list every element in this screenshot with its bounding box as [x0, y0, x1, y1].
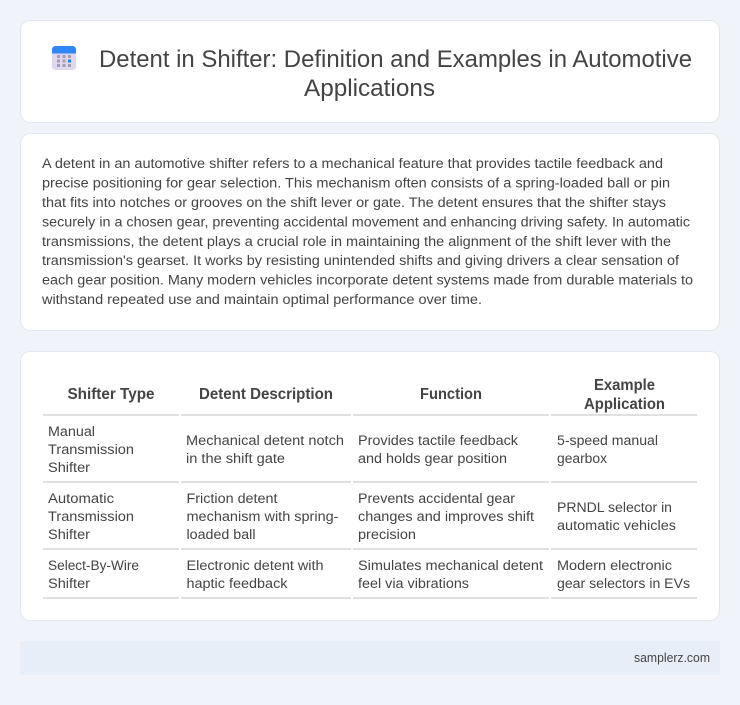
table header: Function — [420, 386, 482, 403]
table row: manual transmission shifter — [48, 424, 658, 476]
table header: Detent Description — [199, 386, 333, 403]
table row: automatic transmission shifter: loaded ball — [186, 527, 256, 543]
table row: select-by-wire shifter: feel via vibrations — [358, 576, 469, 592]
description text — [41, 156, 693, 308]
description text: that fits into notches or grooves on the shift lever or gate. The detent ensures that the shifter stays — [42, 195, 666, 211]
title: Detent in Shifter: Definition and Examples in Automotive — [99, 46, 692, 73]
table header — [68, 377, 665, 413]
panel: title card — [20, 20, 720, 123]
table row: manual transmission shifter: gearbox — [557, 451, 607, 467]
table row: manual transmission shifter: Manual — [48, 424, 95, 440]
table row: select-by-wire shifter: haptic feedback — [186, 576, 288, 592]
table row: manual transmission shifter: Provides tactile feedback — [358, 433, 519, 449]
table row: select-by-wire shifter: Select-By-Wire — [48, 558, 139, 574]
table row: automatic transmission shifter: precision — [358, 527, 416, 543]
table row: manual transmission shifter: Shifter — [48, 460, 90, 476]
table row: select-by-wire shifter: Simulates mechanical detent — [358, 558, 543, 574]
table row: automatic transmission shifter: Prevents accidental gear — [358, 491, 515, 507]
table row: select-by-wire shifter: Shifter — [48, 576, 90, 592]
description text: A detent in an automotive shifter refers to a mechanical feature that provides tactile feedback and — [42, 156, 663, 172]
table row: select-by-wire shifter — [48, 558, 690, 592]
table row: automatic transmission shifter: changes and improves shift — [358, 509, 534, 525]
panel: description card — [20, 133, 720, 331]
table row: select-by-wire shifter: Modern electronic — [557, 558, 672, 574]
footer text: samplerz.com: samplerz.com — [634, 651, 710, 665]
title — [99, 46, 692, 102]
table row: manual transmission shifter: Transmission — [48, 442, 134, 458]
table header: Example — [594, 377, 655, 394]
description text: each gear position. Many modern vehicles incorporate detent systems made from durable materials to — [42, 273, 693, 289]
table row: automatic transmission shifter: Transmission — [48, 509, 134, 525]
table row: select-by-wire shifter: Electronic detent with — [186, 558, 324, 574]
description text: precise positioning for gear selection. This mechanism often consists of a spring-loaded ball or pin — [42, 175, 670, 191]
table header: Shifter Type — [68, 386, 155, 403]
description text: securely in a chosen gear, preventing accidental movement and enhancing driving safety. In automatic — [42, 214, 690, 230]
description text: withstand repeated use and maintain optimal performance over time. — [41, 292, 482, 308]
table row: automatic transmission shifter — [48, 491, 676, 543]
description text: transmissions, the detent plays a crucial role in maintaining the alignment of the shift lever with the — [42, 234, 671, 250]
table row: automatic transmission shifter: PRNDL selector in — [557, 500, 672, 516]
panel: table card — [20, 351, 720, 621]
icon: calendar — [52, 46, 76, 70]
table row: select-by-wire shifter: gear selectors in EVs — [557, 576, 690, 592]
table row: automatic transmission shifter: Automatic — [48, 491, 114, 507]
table row: automatic transmission shifter: automatic vehicles — [557, 518, 676, 534]
table row: automatic transmission shifter: mechanism with spring- — [186, 509, 339, 525]
table row: automatic transmission shifter: Shifter — [48, 527, 90, 543]
table row: automatic transmission shifter: Friction detent — [186, 491, 278, 507]
table row: manual transmission shifter: in the shift gate — [186, 451, 285, 467]
title: Applications — [304, 75, 435, 102]
table row: manual transmission shifter: 5-speed manual — [557, 433, 658, 449]
description text: transmission's gearset. It works by resisting unintended shifts and giving drivers a clear sensation of — [42, 253, 679, 269]
table row: manual transmission shifter: and holds gear position — [358, 451, 507, 467]
footer bar — [20, 641, 720, 675]
table header: Application — [584, 396, 665, 413]
table row: manual transmission shifter: Mechanical detent notch — [186, 433, 344, 449]
